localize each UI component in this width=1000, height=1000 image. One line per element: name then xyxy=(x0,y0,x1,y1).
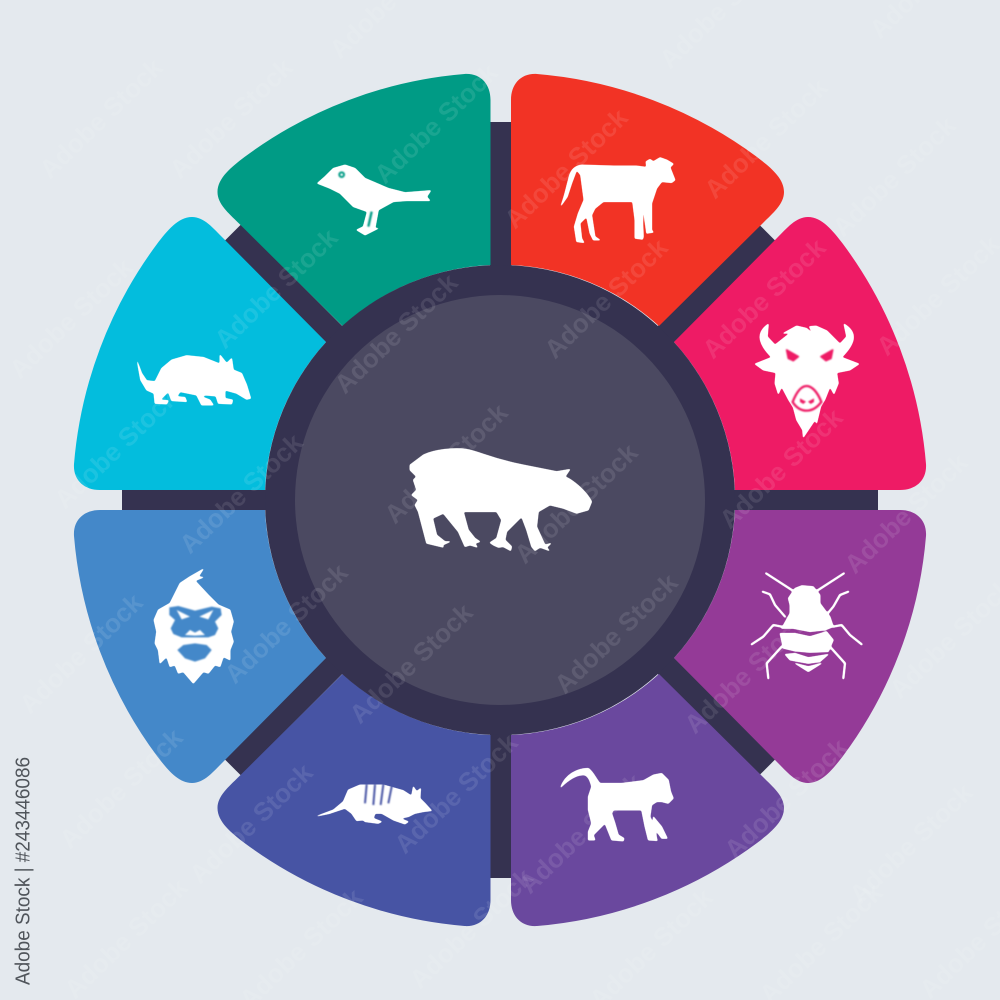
segment: teal xyxy=(218,74,490,326)
watermark: Adobe Stock repeats: Adobe Stock xyxy=(678,607,814,739)
icon: baboon xyxy=(561,768,673,841)
icon: bug xyxy=(752,573,862,678)
watermark: Adobe Stock repeats: Adobe Stock xyxy=(548,567,684,699)
watermark: Adobe Stock repeats: Adobe Stock xyxy=(13,587,149,719)
watermark: Adobe Stock repeats: Adobe Stock xyxy=(53,722,189,854)
icon: armadillo xyxy=(317,785,432,824)
watermark: Adobe Stock repeats: Adobe Stock xyxy=(343,597,479,729)
watermark: Adobe Stock repeats: Adobe Stock xyxy=(513,767,649,899)
watermark: Adobe Stock repeats: Adobe Stock xyxy=(328,267,464,399)
segment: indigo xyxy=(218,674,490,926)
center ring xyxy=(265,265,735,735)
watermark: Adobe Stock repeats: Adobe Stock xyxy=(378,397,514,529)
segment: purple xyxy=(674,510,926,783)
side stock id text: Adobe Stock | #243446086 xyxy=(12,757,34,985)
watermark: Adobe Stock repeats: Adobe Stock xyxy=(218,557,354,689)
watermark: Adobe Stock repeats: Adobe Stock xyxy=(838,447,974,579)
segment: cyan xyxy=(74,217,326,490)
watermark: Adobe Stock repeats: Adobe Stock xyxy=(698,72,834,204)
watermark: Adobe Stock repeats: Adobe Stock xyxy=(48,382,184,514)
watermark: Adobe Stock repeats: Adobe Stock xyxy=(718,732,854,864)
watermark: Adobe Stock repeats: Adobe Stock xyxy=(538,232,674,364)
icon: aardvark xyxy=(137,355,251,405)
watermark: Adobe Stock repeats: Adobe Stock xyxy=(843,777,979,909)
segment: blue xyxy=(74,510,326,783)
watermark: Adobe Stock repeats: Adobe Stock xyxy=(163,52,299,184)
watermark: Adobe Stock repeats: Adobe Stock xyxy=(498,102,634,234)
watermark: Adobe Stock repeats: Adobe Stock xyxy=(696,232,832,364)
watermark: Adobe Stock repeats: Adobe Stock xyxy=(368,57,504,189)
watermark: Adobe Stock repeats: Adobe Stock xyxy=(3,252,139,384)
icon: gorilla xyxy=(154,569,233,683)
watermark: Adobe Stock repeats: Adobe Stock xyxy=(33,52,169,184)
icon: cow xyxy=(561,158,675,243)
icon: bird xyxy=(317,165,431,235)
center disc xyxy=(295,295,705,705)
watermark: Adobe Stock repeats: Adobe Stock xyxy=(403,862,539,994)
segment: violet xyxy=(511,674,784,926)
watermark: Adobe Stock repeats: Adobe Stock xyxy=(183,757,319,889)
watermark: Adobe Stock repeats: Adobe Stock xyxy=(208,222,344,354)
segment: red xyxy=(511,74,784,326)
watermark: Adobe Stock repeats: Adobe Stock xyxy=(388,727,524,859)
dark cross spokes xyxy=(122,122,878,878)
watermark: Adobe Stock repeats: Adobe Stock xyxy=(826,110,962,242)
icon: bison xyxy=(755,324,859,437)
watermark: Adobe Stock repeats: Adobe Stock xyxy=(508,437,644,569)
watermark: Adobe Stock repeats: Adobe Stock xyxy=(713,402,849,534)
icon: tapir xyxy=(410,449,592,551)
segment: pink xyxy=(674,217,926,490)
watermark: Adobe Stock repeats: Adobe Stock xyxy=(173,427,309,559)
